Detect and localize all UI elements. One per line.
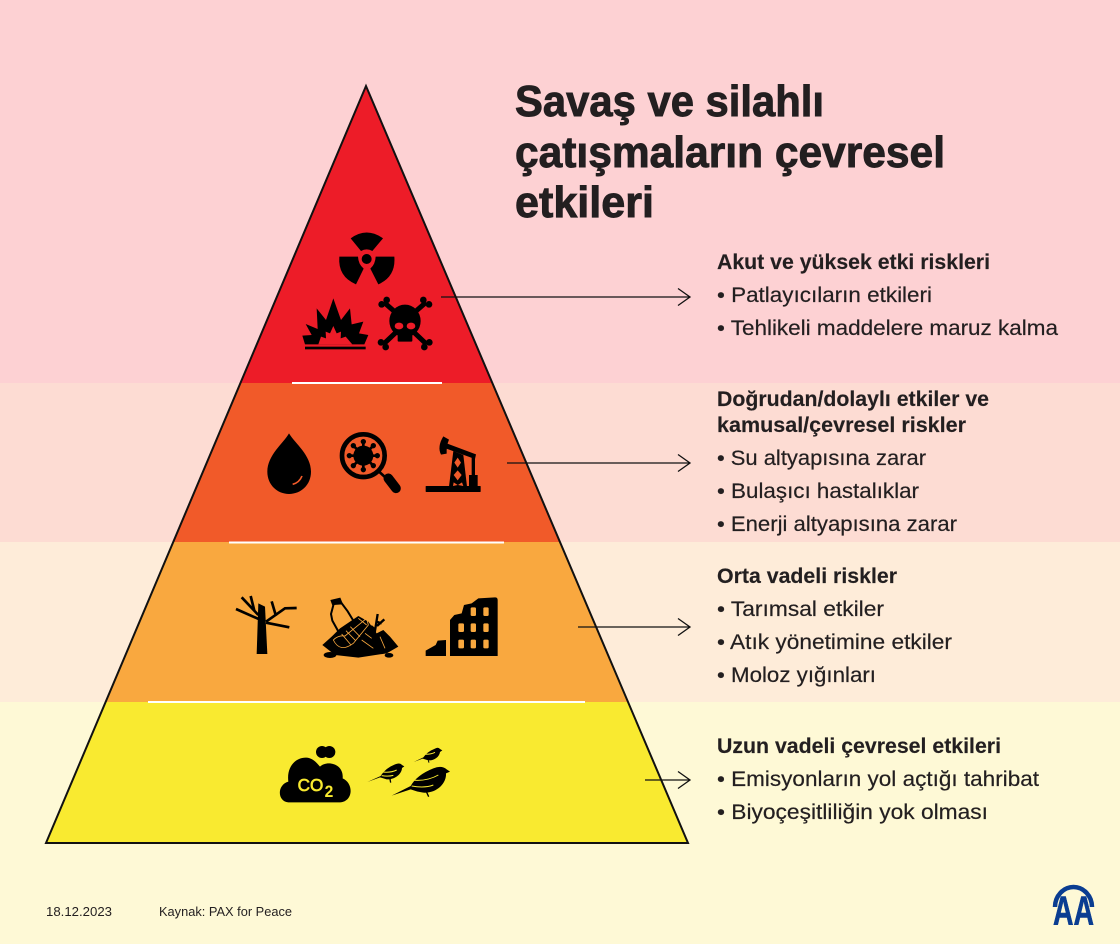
icon: CO2 cloud: CO	[298, 775, 323, 795]
arrow: direct effects	[507, 454, 690, 472]
icon: waste pile	[322, 598, 398, 658]
icon: CO2 cloud	[280, 746, 351, 802]
pyramid chart	[40, 80, 700, 844]
icon: virus under magnifier	[342, 434, 396, 488]
icon: water drop	[267, 433, 311, 494]
title: çatışmaların çevresel	[515, 128, 945, 177]
icon: skull and crossbones	[378, 297, 433, 350]
footer date: 18.12.2023	[46, 905, 112, 919]
icon: dead tree	[236, 596, 297, 654]
text block: acute risks	[717, 251, 1058, 340]
text block: acute risks: • Patlayıcıların etkileri	[717, 284, 932, 307]
arrow: long term	[645, 772, 690, 788]
logo: Anadolu Agency	[1053, 887, 1094, 934]
text block: acute risks: Akut ve yüksek etki riskleri	[717, 251, 990, 274]
title: etkileri	[515, 178, 654, 227]
title	[515, 77, 945, 227]
text block: direct and indirect effects	[717, 388, 989, 536]
text block: long term effects: Uzun vadeli çevresel etkileri	[717, 735, 1001, 758]
arrow: medium term	[578, 618, 690, 636]
icon: oil pump	[426, 436, 481, 492]
icon: ruined building	[426, 597, 498, 656]
text block: long term effects: • Emisyonların yol açtığı tahribat	[717, 768, 1039, 791]
text block: medium term risks: • Tarımsal etkiler	[717, 598, 884, 621]
text block: acute risks: • Tehlikeli maddelere maruz kalma	[717, 317, 1058, 340]
text block: medium term risks: • Atık yönetimine etkiler	[717, 631, 952, 654]
text block: direct and indirect effects: kamusal/çevresel riskler	[717, 414, 966, 437]
text block: direct and indirect effects: • Enerji altyapısına zarar	[717, 513, 957, 536]
text block: medium term risks: Orta vadeli riskler	[717, 565, 897, 588]
icon: radiation	[339, 232, 394, 284]
pyramid tier: acute risks	[242, 88, 492, 383]
title: Savaş ve silahlı	[515, 77, 824, 126]
arrow: acute risks	[441, 288, 690, 306]
text block: long term effects: • Biyoçeşitliliğin yok olması	[717, 801, 988, 824]
pyramid tier: medium term risks	[106, 542, 627, 702]
icon: birds	[367, 748, 450, 797]
icon: explosion	[302, 298, 368, 349]
text block: long term effects	[717, 735, 1039, 824]
text block: direct and indirect effects: • Bulaşıcı hastalıklar	[717, 480, 919, 503]
pyramid tier: long term effects	[40, 702, 700, 844]
text block: medium term risks	[717, 565, 952, 687]
logo: Anadolu Agency: AA	[1053, 888, 1094, 934]
icon: CO2 cloud: 2	[325, 782, 333, 801]
text block: medium term risks: • Moloz yığınları	[717, 664, 876, 687]
footer source: Kaynak: PAX for Peace	[159, 905, 292, 919]
text block: direct and indirect effects: Doğrudan/dolaylı etkiler ve	[717, 388, 989, 411]
pyramid tier: direct and indirect effects	[174, 383, 559, 542]
text block: direct and indirect effects: • Su altyapısına zarar	[717, 447, 926, 470]
